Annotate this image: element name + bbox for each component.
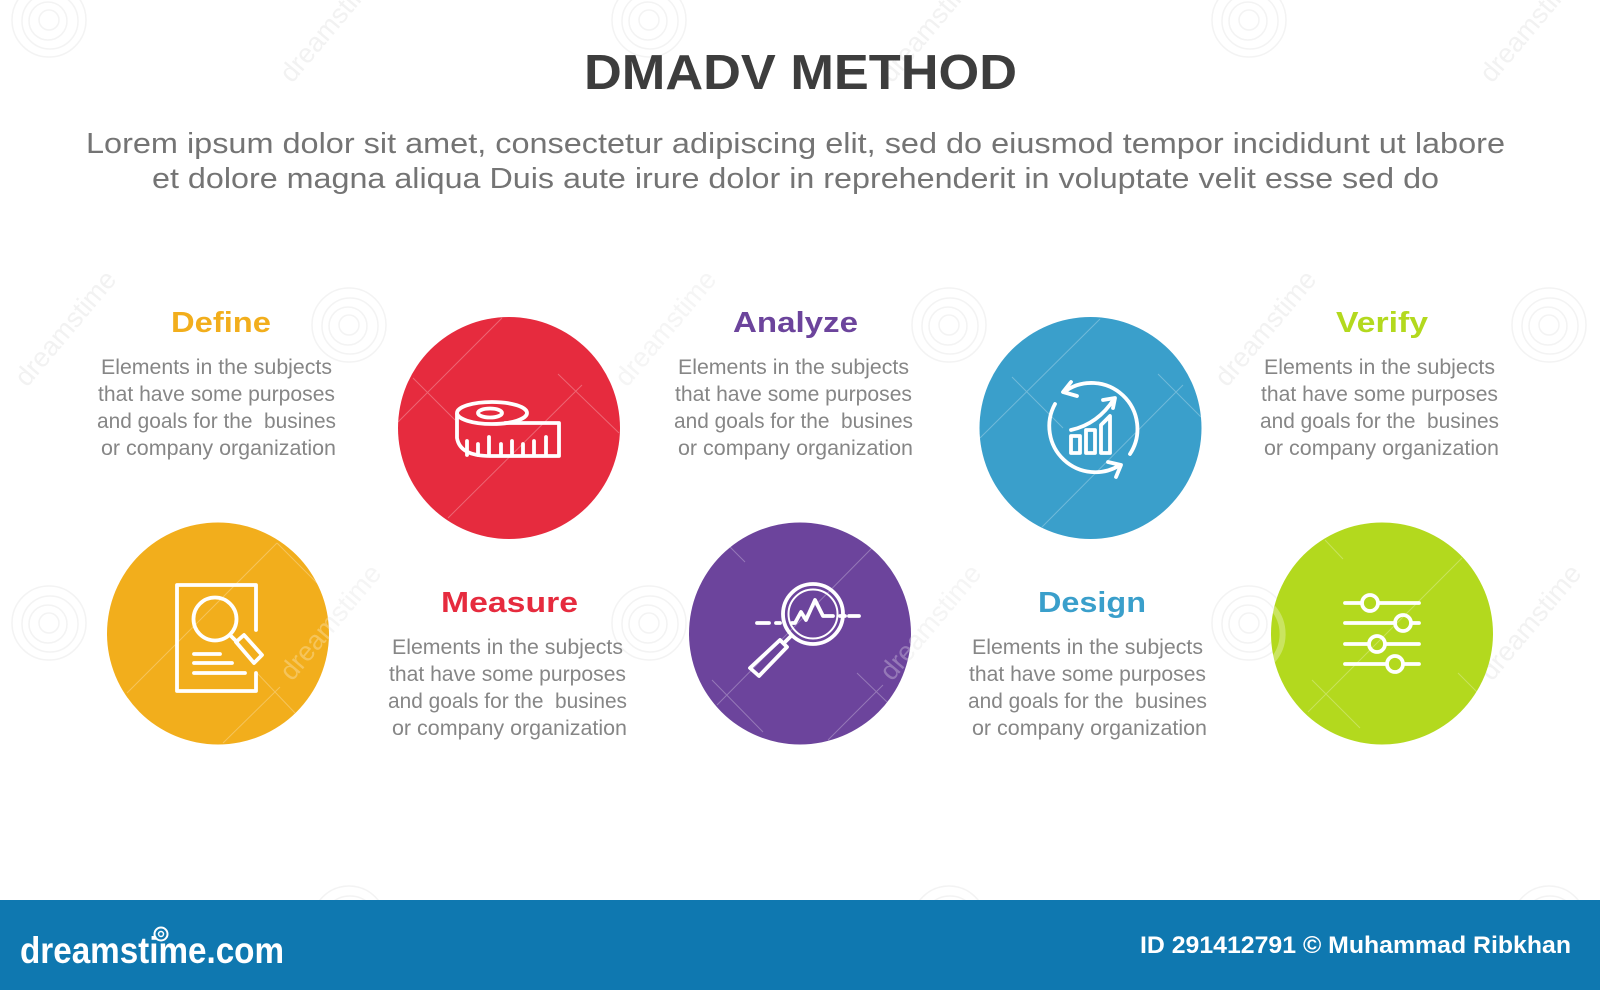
text block: design: or company organization [972,716,1207,740]
panel: analyze [674,307,913,744]
text block: analyze: or company organization [678,436,913,460]
subtitle [86,128,1505,195]
watermark background: dreamstime [1209,265,1322,392]
text block: measure: that have some purposes [389,662,626,686]
circle: verify [1271,522,1493,744]
text block: analyze: and goals for the busines [674,409,913,433]
text block: verify: or company organization [1264,436,1499,460]
title: DMADV METHOD [584,46,1017,100]
watermark background: dreamstime [1474,559,1587,686]
heading: measure: Measure [441,587,578,619]
text block: define: Elements in the subjects [101,355,332,379]
text block: analyze: Elements in the subjects [678,355,909,379]
text block: measure [388,635,627,740]
icon: document with magnifier [177,585,262,691]
text block: define: and goals for the busines [97,409,336,433]
text block: verify: that have some purposes [1261,382,1498,406]
heading: analyze: Analyze [733,307,858,339]
text block: design: and goals for the busines [968,689,1207,713]
icon: sliders [1345,595,1419,672]
watermark lines over circles [127,265,1483,743]
text block: define: that have some purposes [98,382,335,406]
text block: verify: Elements in the subjects [1264,355,1495,379]
panel: verify [1260,307,1499,744]
footer band [0,900,1600,990]
subtitle: Lorem ipsum dolor sit amet, consectetur adipiscing elit, sed do eiusmod tempor incididunt ut labore [86,128,1505,160]
text block: design: that have some purposes [969,662,1206,686]
watermark lines over circles: dreamstime [874,559,987,686]
heading: design: Design [1038,587,1146,619]
text block: analyze: that have some purposes [675,382,912,406]
credit text: ID 291412791 © Muhammad Ribkhan [1140,932,1571,959]
icon: measuring tape [457,402,559,456]
text block: measure: and goals for the busines [388,689,627,713]
icon: magnifier with signal [750,584,859,676]
text block: define: or company organization [101,436,336,460]
circle: define [107,522,329,744]
logo: dreamstime.com: dreamstime.com [20,930,284,971]
watermark background: dreamstime [874,559,987,686]
watermark lines over circles: dreamstime [609,265,722,392]
text block: design: Elements in the subjects [972,635,1203,659]
subtitle: et dolore magna aliqua Duis aute irure dolor in reprehenderit in voluptate velit esse sed do [152,163,1439,195]
heading: verify: Verify [1336,307,1428,339]
circle: analyze [689,522,911,744]
watermark background: dreamstime [9,265,122,392]
text block: measure: Elements in the subjects [392,635,623,659]
text block: verify [1260,355,1499,460]
text block: design [968,635,1207,740]
text block: measure: or company organization [392,716,627,740]
watermark background: dreamstime [609,265,722,392]
panel: measure [388,317,627,740]
panel: define [97,307,336,744]
text block: define [97,355,336,460]
watermark background: dreamstime [274,559,387,686]
watermark lines over circles: dreamstime [274,559,387,686]
circle: design [980,317,1202,539]
text block: analyze [674,355,913,460]
icon: growth cycle [1049,382,1137,477]
panel: design [968,317,1207,740]
text block: verify: and goals for the busines [1260,409,1499,433]
circle: measure [398,317,620,539]
heading: define: Define [171,307,271,339]
